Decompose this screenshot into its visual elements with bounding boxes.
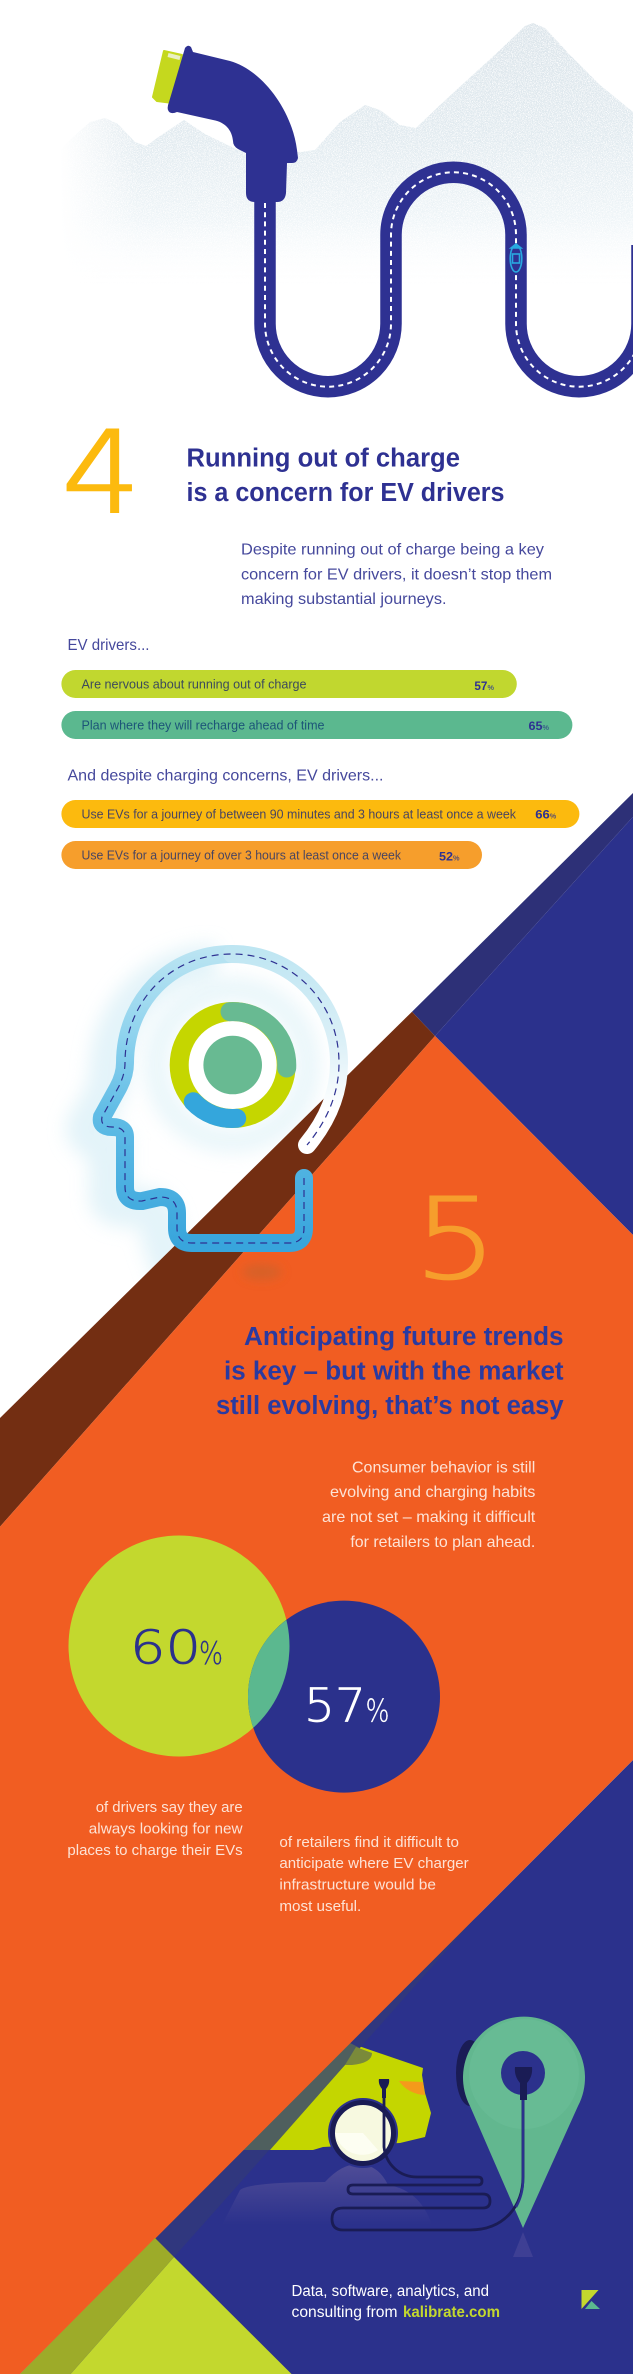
car body xyxy=(245,2043,431,2150)
stat 57 percent: % xyxy=(366,1694,390,1730)
dark stripe over car xyxy=(243,2043,360,2150)
icon: car wheel xyxy=(328,2098,398,2168)
consumer behavior text: are not set – making it difficult xyxy=(322,1509,536,1526)
heading: anticipating future trends: Anticipating future trends xyxy=(244,1323,564,1351)
icon: car on road xyxy=(510,244,522,272)
overlap xyxy=(248,1620,290,1728)
donut blue segment xyxy=(193,1102,237,1118)
stat 57 percent: 57 xyxy=(304,1678,366,1732)
intro text xyxy=(241,541,552,608)
bar: journey over 3 hours 52 percent: Use EVs for a journey of over 3 hours at least once a week xyxy=(82,848,402,862)
navy triangle right xyxy=(435,817,633,1235)
heading: running out of charge xyxy=(186,445,504,507)
cast shadow haze xyxy=(222,2164,432,2225)
intro text: Despite running out of charge being a key xyxy=(241,541,544,558)
icon: location pin xyxy=(456,2017,585,2228)
caption: retailers: of retailers find it difficult to xyxy=(279,1834,459,1851)
bar: plan 65 percent: Plan where they will recharge ahead of time xyxy=(82,718,325,732)
road shaped cable xyxy=(265,172,633,387)
head illustration xyxy=(86,954,339,1280)
head dashed centre xyxy=(102,954,339,1243)
caption: retailers: infrastructure would be xyxy=(279,1877,436,1894)
donut ring xyxy=(179,1012,286,1118)
bar: plan 65 percent xyxy=(61,711,572,739)
caption: retailers xyxy=(279,1834,469,1915)
number 4: 4 xyxy=(62,408,140,539)
footer text xyxy=(292,2283,500,2321)
dark stripe xyxy=(155,1913,480,2257)
icon: charging plug xyxy=(153,46,298,202)
stat 57 percent xyxy=(304,1678,390,1732)
bar: journey 90 minutes 66 percent: 66 xyxy=(535,808,550,822)
consumer behavior text: Consumer behavior is still xyxy=(352,1460,535,1477)
stat 60 percent xyxy=(130,1620,223,1674)
bar: nervous 57 percent xyxy=(61,670,517,698)
bar: journey over 3 hours 52 percent: 52 xyxy=(439,850,453,864)
consumer behavior text: for retailers to plan ahead. xyxy=(350,1534,535,1551)
bar: journey 90 minutes 66 percent xyxy=(61,800,579,828)
stat 60 percent: % xyxy=(199,1636,223,1672)
stat 60 percent: 60 xyxy=(130,1620,201,1674)
navy lower area xyxy=(20,1760,633,2374)
heading: running out of charge: is a concern for EV drivers xyxy=(186,479,504,507)
orange field xyxy=(0,1036,633,2374)
icon: car plug head xyxy=(379,2079,389,2098)
consumer behavior text: evolving and charging habits xyxy=(330,1484,535,1501)
caption: drivers: places to charge their EVs xyxy=(67,1842,243,1859)
circle 60 percent xyxy=(68,1536,290,1756)
intro text: making substantial journeys. xyxy=(241,591,446,608)
icon: pin plug head xyxy=(515,2067,532,2100)
caption: retailers: anticipate where EV charger xyxy=(279,1855,469,1872)
label: EV drivers: EV drivers... xyxy=(68,637,150,654)
car roof shade xyxy=(345,2047,372,2065)
footer text: consulting from xyxy=(292,2304,398,2321)
charging cable xyxy=(332,2088,523,2230)
bar: journey over 3 hours 52 percent: % xyxy=(453,854,460,863)
bar: plan 65 percent: % xyxy=(542,723,549,732)
footer text: kalibrate.com xyxy=(403,2304,500,2321)
number 5: 5 xyxy=(414,1175,498,1305)
footer text: Data, software, analytics, and xyxy=(292,2283,489,2300)
head glow xyxy=(86,964,308,1280)
circle 57 percent xyxy=(248,1601,440,1793)
icon: kalibrate logo xyxy=(582,2290,600,2309)
orange shade under chin xyxy=(242,1264,282,1280)
bar: nervous 57 percent: Are nervous about running out of charge xyxy=(82,678,307,692)
heading: anticipating future trends: still evolving, that’s not easy xyxy=(216,1392,564,1420)
brown band xyxy=(0,1012,435,1527)
heading: anticipating future trends: is key – but with the market xyxy=(224,1357,564,1385)
caption: retailers: most useful. xyxy=(279,1898,361,1915)
navy stripe top xyxy=(412,793,633,1036)
head outline left xyxy=(102,954,304,1243)
bar: nervous 57 percent: % xyxy=(488,683,494,692)
donut centre xyxy=(203,1036,262,1094)
bar: journey over 3 hours 52 percent xyxy=(61,841,482,869)
caption: drivers: of drivers say they are xyxy=(96,1799,243,1816)
caption: drivers: always looking for new xyxy=(89,1820,243,1837)
heading: running out of charge: Running out of charge xyxy=(186,445,460,473)
heading: anticipating future trends xyxy=(216,1323,564,1420)
intro text: concern for EV drivers, it doesn’t stop them xyxy=(241,566,552,583)
caption: drivers xyxy=(67,1799,243,1859)
label: despite charging concerns: And despite charging concerns, EV drivers... xyxy=(68,768,384,785)
background diagonal shapes xyxy=(0,793,633,2374)
lime triangle xyxy=(71,2257,291,2374)
bar: journey 90 minutes 66 percent: Use EVs for a journey of between 90 minutes and 3 hours at least once a week xyxy=(82,808,517,822)
bar: journey 90 minutes 66 percent: % xyxy=(550,812,557,821)
venn circles xyxy=(68,1536,440,1793)
bar: plan 65 percent: 65 xyxy=(528,719,543,733)
consumer behavior text xyxy=(322,1460,536,1551)
car tail light xyxy=(399,2081,425,2095)
bar: nervous 57 percent: 57 xyxy=(474,679,488,693)
donut green segment xyxy=(230,1012,287,1068)
pin tip haze xyxy=(513,2232,533,2257)
mountains backdrop xyxy=(50,23,633,300)
olive stripe xyxy=(20,2238,174,2374)
head outline right xyxy=(232,954,339,1145)
